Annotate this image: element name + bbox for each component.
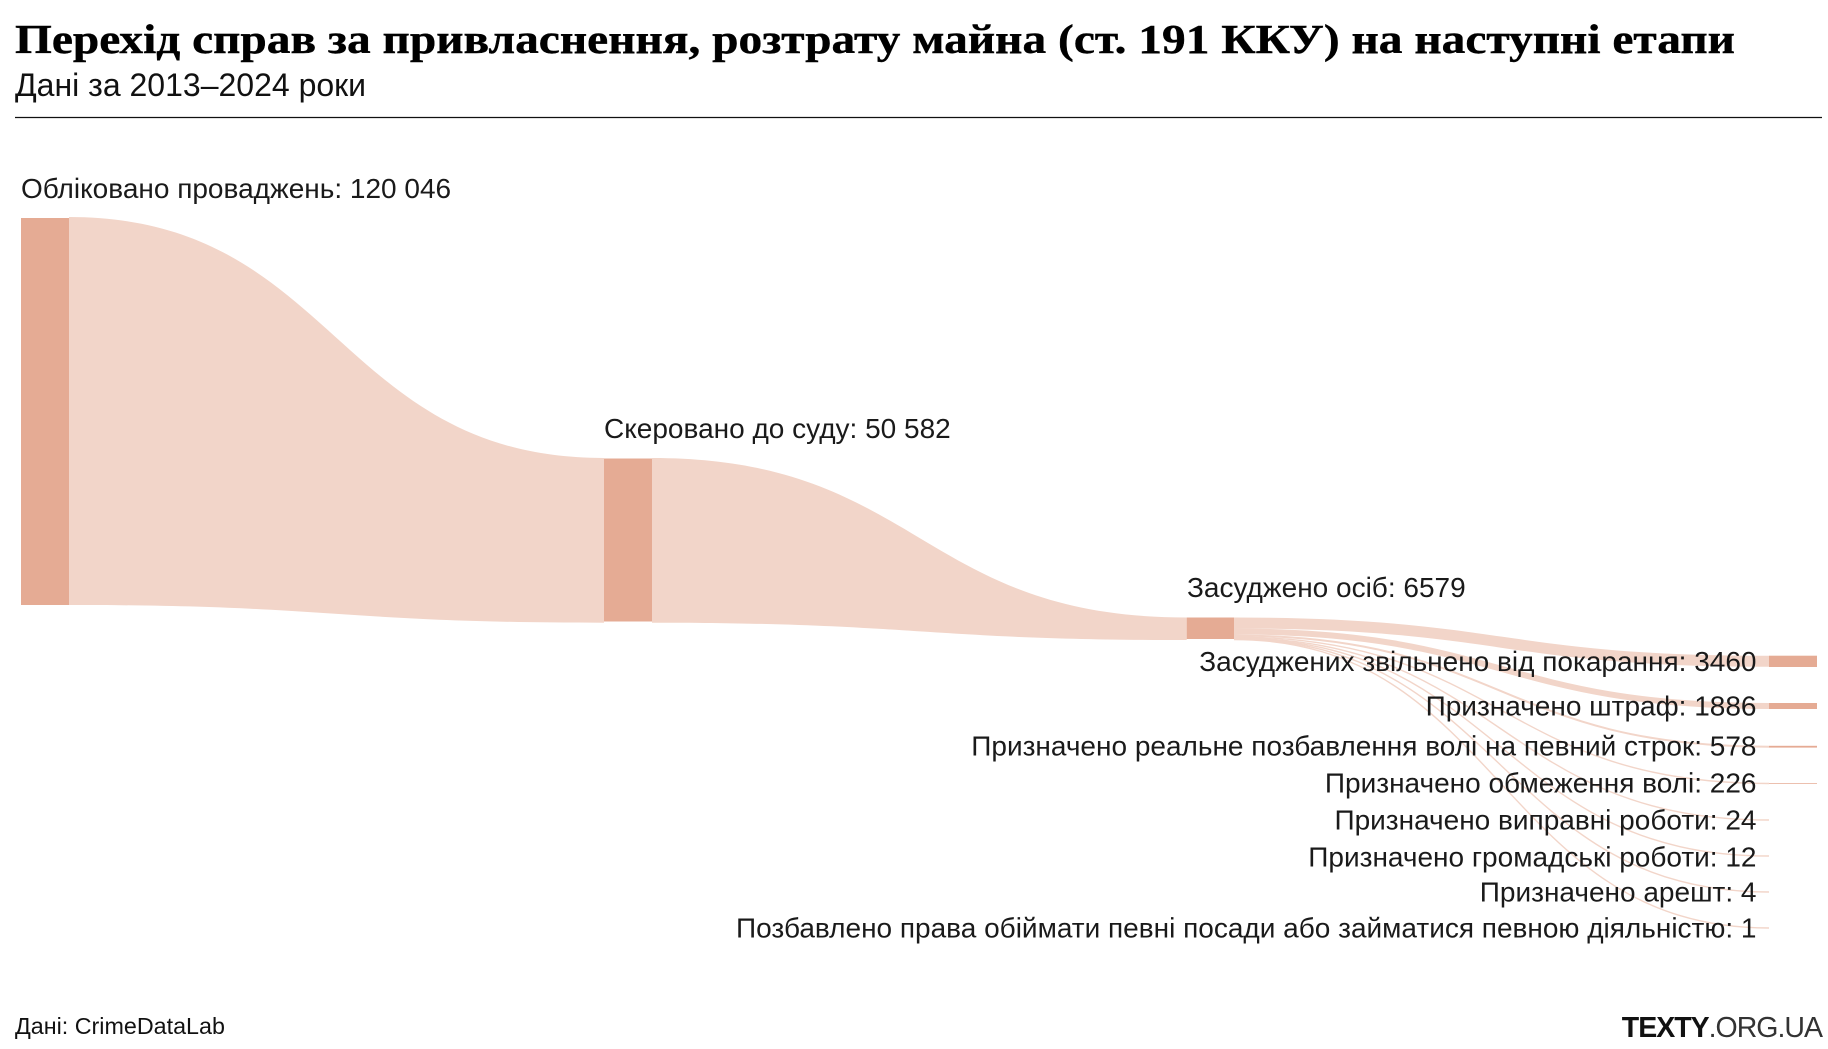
node: imprisonment (1769, 746, 1817, 748)
label: correctional labour: Призначено виправні роботи: 24 (1334, 804, 1756, 836)
label: imprisonment: Призначено реальне позбавлення волі на певний строк: 578 (971, 730, 1756, 762)
label: released: Засуджених звільнено від покарання: 3460 (1199, 646, 1756, 677)
node: fine (1769, 703, 1817, 709)
logo: TEXTY.ORG.UA (1622, 1012, 1823, 1044)
label: sent to court: Скеровано до суду: 50 582 (604, 413, 951, 444)
label: community service: Призначено громадські роботи: 12 (1308, 842, 1756, 872)
label: registered proceedings: Обліковано проваджень: 120 046 (21, 173, 451, 204)
label: restriction: Призначено обмеження волі: 226 (1325, 768, 1756, 798)
subtitle: Дані за 2013–2024 роки (15, 67, 366, 103)
link: court to convicted (652, 458, 1187, 640)
label: convicted: Засуджено осіб: 6579 (1187, 572, 1466, 603)
label: fine: Призначено штраф: 1886 (1426, 690, 1756, 722)
node: released from punishment (1769, 656, 1817, 667)
source note: Дані: CrimeDataLab (15, 1013, 225, 1039)
title: Перехід справ за привласнення, розтрату майна (ст. 191 ККУ) на наступні етапи (15, 16, 1735, 62)
node: registered (21, 218, 69, 605)
node: restriction of liberty (1769, 783, 1817, 784)
node: sent to court (604, 458, 652, 622)
node: convicted (1187, 618, 1234, 639)
link: registered to court (69, 217, 604, 623)
label: arrest: Призначено арешт: 4 (1480, 876, 1756, 908)
links: convicted to outcomes (1234, 623, 1769, 928)
label: deprivation of right: Позбавлено права обіймати певні посади або займатися певною діяльністю: 1 (736, 912, 1756, 944)
sankey chart (21, 217, 1817, 928)
